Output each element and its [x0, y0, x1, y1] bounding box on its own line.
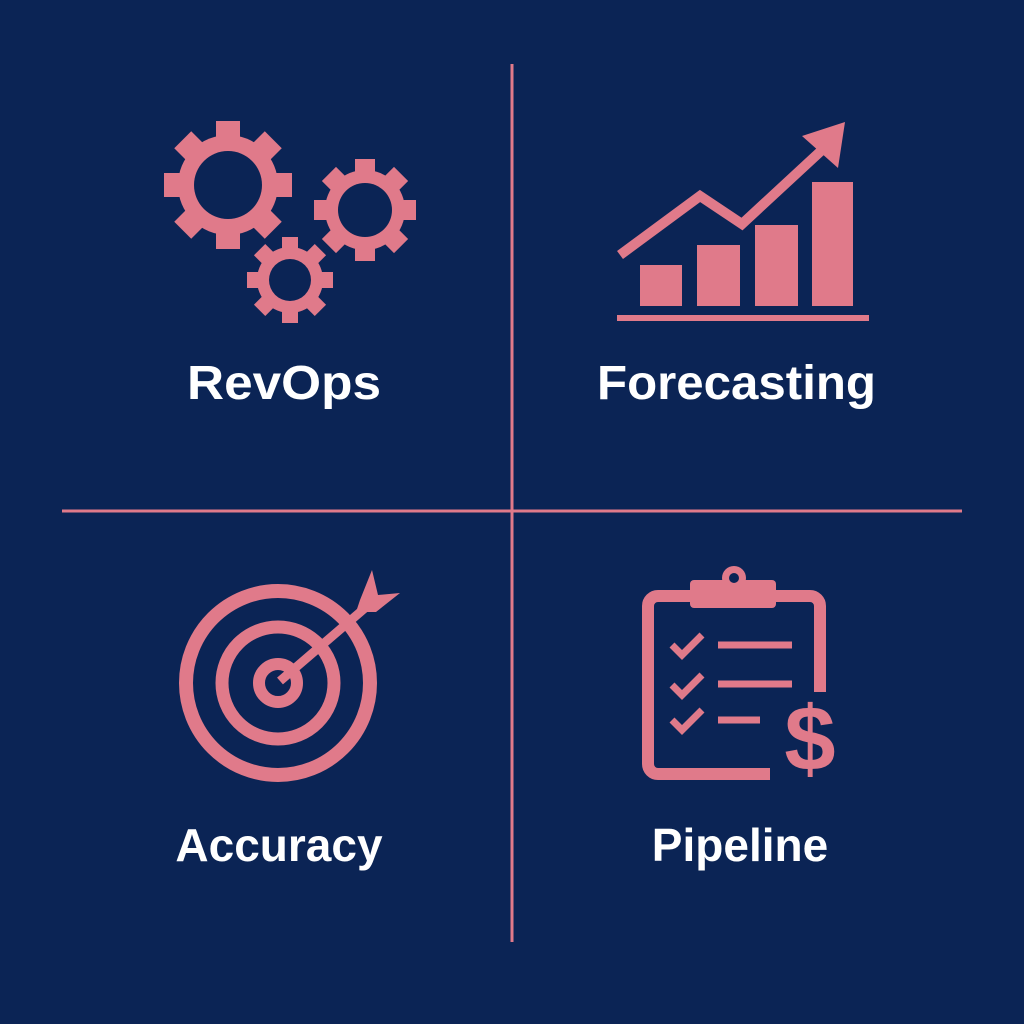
label: Accuracy: Accuracy — [175, 819, 383, 871]
icon: target — [186, 570, 400, 775]
icon: clipboard with dollar — [648, 566, 842, 790]
icon: gears — [164, 121, 416, 323]
icon: clipboard with dollar: $ — [784, 688, 836, 790]
label: Pipeline: Pipeline — [652, 819, 828, 871]
label: Forecasting: Forecasting — [597, 357, 876, 410]
label: RevOps: RevOps — [187, 357, 381, 410]
icon: growth chart — [617, 122, 869, 321]
